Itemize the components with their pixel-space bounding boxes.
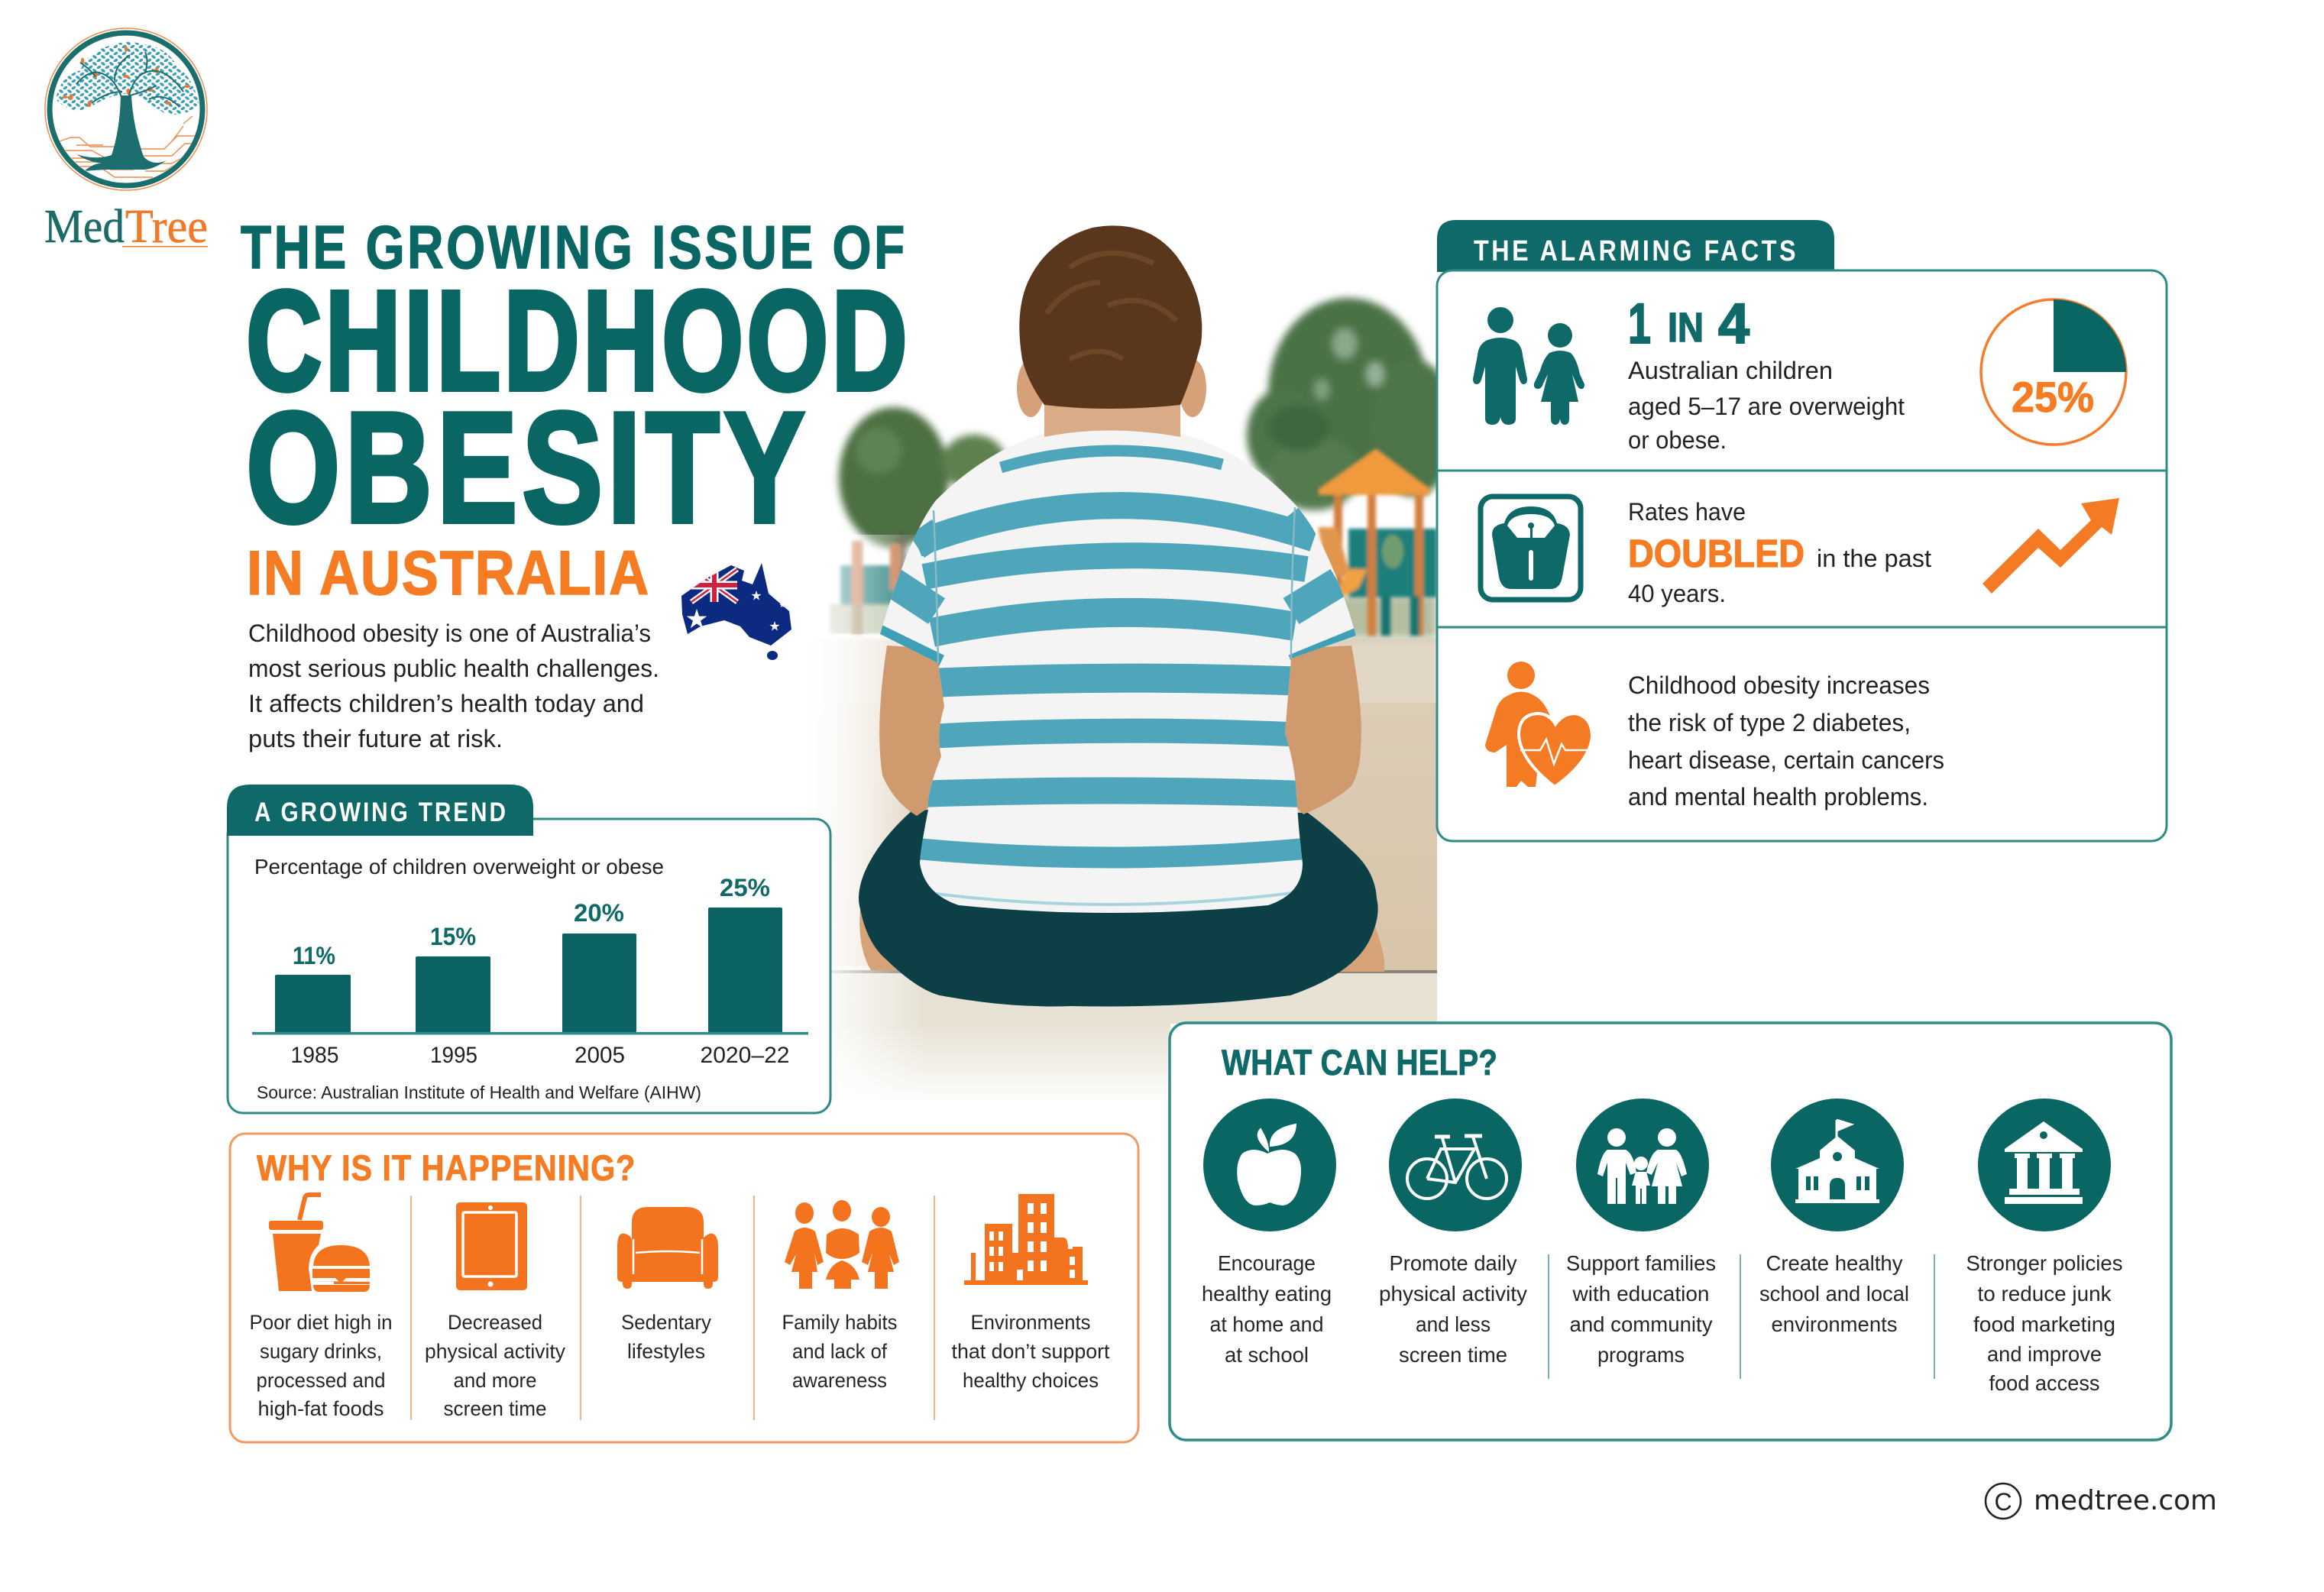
fact text: health risks: Childhood obesity increases: [1628, 671, 1930, 699]
solutions text: at home and: [1210, 1312, 1323, 1336]
stat: 1 in 4: 1: [1628, 292, 1651, 355]
fact text: doubled: DOUBLED: [1628, 532, 1804, 575]
intro paragraph: Childhood obesity is one of Australia’s: [248, 620, 651, 647]
icon: Australia flag map: [681, 561, 791, 660]
logo wordmark: [44, 201, 208, 253]
knees: [859, 909, 917, 970]
solutions text: food marketing: [1973, 1312, 2115, 1336]
causes text: healthy choices: [963, 1369, 1099, 1392]
icon: apple: [1203, 1099, 1336, 1231]
arms: [879, 646, 947, 816]
intro paragraph: [248, 620, 659, 752]
solutions text: and community: [1569, 1312, 1713, 1336]
causes text: and lack of: [792, 1340, 887, 1363]
solutions text: with education: [1572, 1282, 1710, 1306]
bar chart: 25%: [720, 874, 770, 901]
title: OBESITY: [246, 380, 804, 555]
causes text: that don’t support: [952, 1340, 1110, 1363]
causes text: high-fat foods: [258, 1397, 384, 1420]
heading: why is it happening: WHY IS IT HAPPENING?: [257, 1149, 635, 1189]
boy figure: [859, 225, 1384, 1006]
bar chart: [252, 874, 808, 1068]
intro paragraph: It affects children’s health today and: [248, 690, 644, 717]
panel: the alarming facts: [1437, 220, 2167, 841]
fact text: health risks: the risk of type 2 diabetes,: [1628, 709, 1911, 736]
solutions text: Stronger policies: [1966, 1251, 2122, 1275]
background scene: trees, playground and ground: [753, 298, 1455, 1111]
fact text: doubled: in the past: [1817, 545, 1931, 572]
solutions text: programs: [1597, 1343, 1685, 1367]
fact text: health risks: heart disease, certain cancers: [1628, 746, 1944, 774]
solutions text: healthy eating: [1202, 1282, 1332, 1306]
causes text: and more: [454, 1369, 536, 1392]
causes text: Poor diet high in: [249, 1311, 393, 1334]
footer: copyright medtree.com: medtree.com: [2034, 1485, 2217, 1516]
icon: two children: [1473, 307, 1584, 425]
photo: boy sitting in playground: [829, 225, 1437, 1091]
solutions text: school and local: [1759, 1282, 1909, 1306]
shirt: [879, 428, 1358, 913]
bar chart: 2005: [575, 1043, 625, 1068]
icon: city buildings: [964, 1194, 1088, 1285]
solutions text: food access: [1989, 1371, 2099, 1395]
tab heading: a growing trend: [227, 785, 533, 836]
panel: why is it happening: [230, 1134, 1138, 1442]
intro paragraph: most serious public health challenges.: [248, 655, 659, 682]
solutions text: to reduce junk: [1977, 1282, 2112, 1306]
fact text: doubled: Rates have: [1628, 498, 1746, 526]
solutions text: environments: [1771, 1312, 1898, 1336]
stat: 1 in 4: [1628, 292, 1749, 355]
heading: what can help: WHAT CAN HELP?: [1222, 1042, 1497, 1082]
icon: sofa: [617, 1207, 718, 1289]
solutions text: Support families: [1566, 1251, 1716, 1275]
chart: 25% pie: 25%: [2012, 373, 2094, 421]
causes text: Sedentary: [621, 1311, 711, 1334]
shorts: [859, 810, 1378, 1006]
stat: 1 in 4: 4: [1718, 292, 1749, 355]
solutions text: Encourage: [1218, 1251, 1316, 1275]
bar chart: 15%: [430, 923, 476, 950]
causes text: Environments: [970, 1311, 1091, 1334]
bar chart: 2020–22: [700, 1043, 790, 1068]
title: [241, 213, 908, 608]
solutions text: physical activity: [1379, 1282, 1527, 1306]
causes text: Family habits: [782, 1311, 897, 1334]
solutions text: and less: [1416, 1312, 1491, 1336]
title: IN AUSTRALIA: [247, 539, 649, 608]
panel: a growing trend: [227, 785, 830, 1113]
causes text: [249, 1311, 1110, 1420]
hair: [1019, 225, 1202, 409]
icon: drink and burger: [269, 1195, 370, 1292]
bar chart: 1995: [430, 1043, 477, 1068]
footer: copyright medtree.com: C: [1994, 1488, 2012, 1516]
fact text: 1 in 4: Australian children: [1628, 357, 1833, 384]
solutions text: at school: [1225, 1343, 1309, 1367]
causes text: processed and: [257, 1369, 385, 1392]
fact text: 1 in 4: or obese.: [1628, 426, 1727, 454]
title: THE GROWING ISSUE OF: [241, 213, 905, 281]
fact text: 1 in 4: [1628, 357, 1905, 454]
tab heading: the alarming facts: [1437, 220, 1834, 272]
fact text: health risks: and mental health problems.: [1628, 783, 1928, 811]
solutions text: Promote daily: [1389, 1251, 1517, 1275]
icon: scale: [1481, 497, 1581, 600]
solutions text: and improve: [1987, 1342, 2102, 1366]
tab heading: the alarming facts: THE ALARMING FACTS: [1474, 235, 1796, 267]
causes text: screen time: [443, 1397, 547, 1420]
solutions text: screen time: [1399, 1343, 1507, 1367]
logo wordmark: Tree: [125, 201, 208, 253]
fact text: doubled: [1628, 498, 1931, 607]
bar chart: 20%: [574, 899, 624, 927]
icon: person with heart: [1485, 662, 1592, 787]
causes text: sugary drinks,: [260, 1340, 382, 1363]
panel: what can help: [1170, 1023, 2171, 1440]
tab heading: a growing trend: A GROWING TREND: [254, 798, 506, 827]
icon: family with child: [1576, 1099, 1709, 1231]
title: CHILDHOOD: [246, 261, 908, 420]
intro paragraph: puts their future at risk.: [248, 725, 503, 752]
icon: bicycle: [1389, 1099, 1522, 1231]
icon: rising arrow: [1983, 498, 2119, 594]
causes text: physical activity: [425, 1340, 565, 1363]
source note: Source: Australian Institute of Health and Welfare (AIHW): [257, 1082, 701, 1102]
icon: government building: [1978, 1099, 2111, 1231]
chart subtitle: Percentage of children overweight or obese: [254, 855, 664, 879]
neck and ears: [1044, 390, 1180, 437]
causes text: lifestyles: [627, 1340, 705, 1363]
bar chart: 11%: [293, 942, 335, 969]
solutions text: Create healthy: [1766, 1251, 1902, 1275]
solutions text: [1202, 1251, 2122, 1395]
stat: 1 in 4: IN: [1668, 305, 1704, 351]
fact text: health risks: [1628, 671, 1944, 811]
icon: family: [785, 1200, 899, 1289]
icon: school: [1771, 1099, 1904, 1231]
fact text: doubled: 40 years.: [1628, 580, 1726, 607]
logo wordmark: Med: [44, 201, 125, 253]
logo emblem: tree in circle: [45, 28, 207, 190]
fact text: 1 in 4: aged 5–17 are overweight: [1628, 393, 1905, 420]
causes text: awareness: [792, 1369, 887, 1392]
logo: MedTree: [44, 28, 208, 253]
chart: 25% pie: [1981, 299, 2126, 445]
causes text: Decreased: [448, 1311, 542, 1334]
icon: tablet: [456, 1202, 527, 1290]
bar chart: 1985: [290, 1043, 339, 1068]
